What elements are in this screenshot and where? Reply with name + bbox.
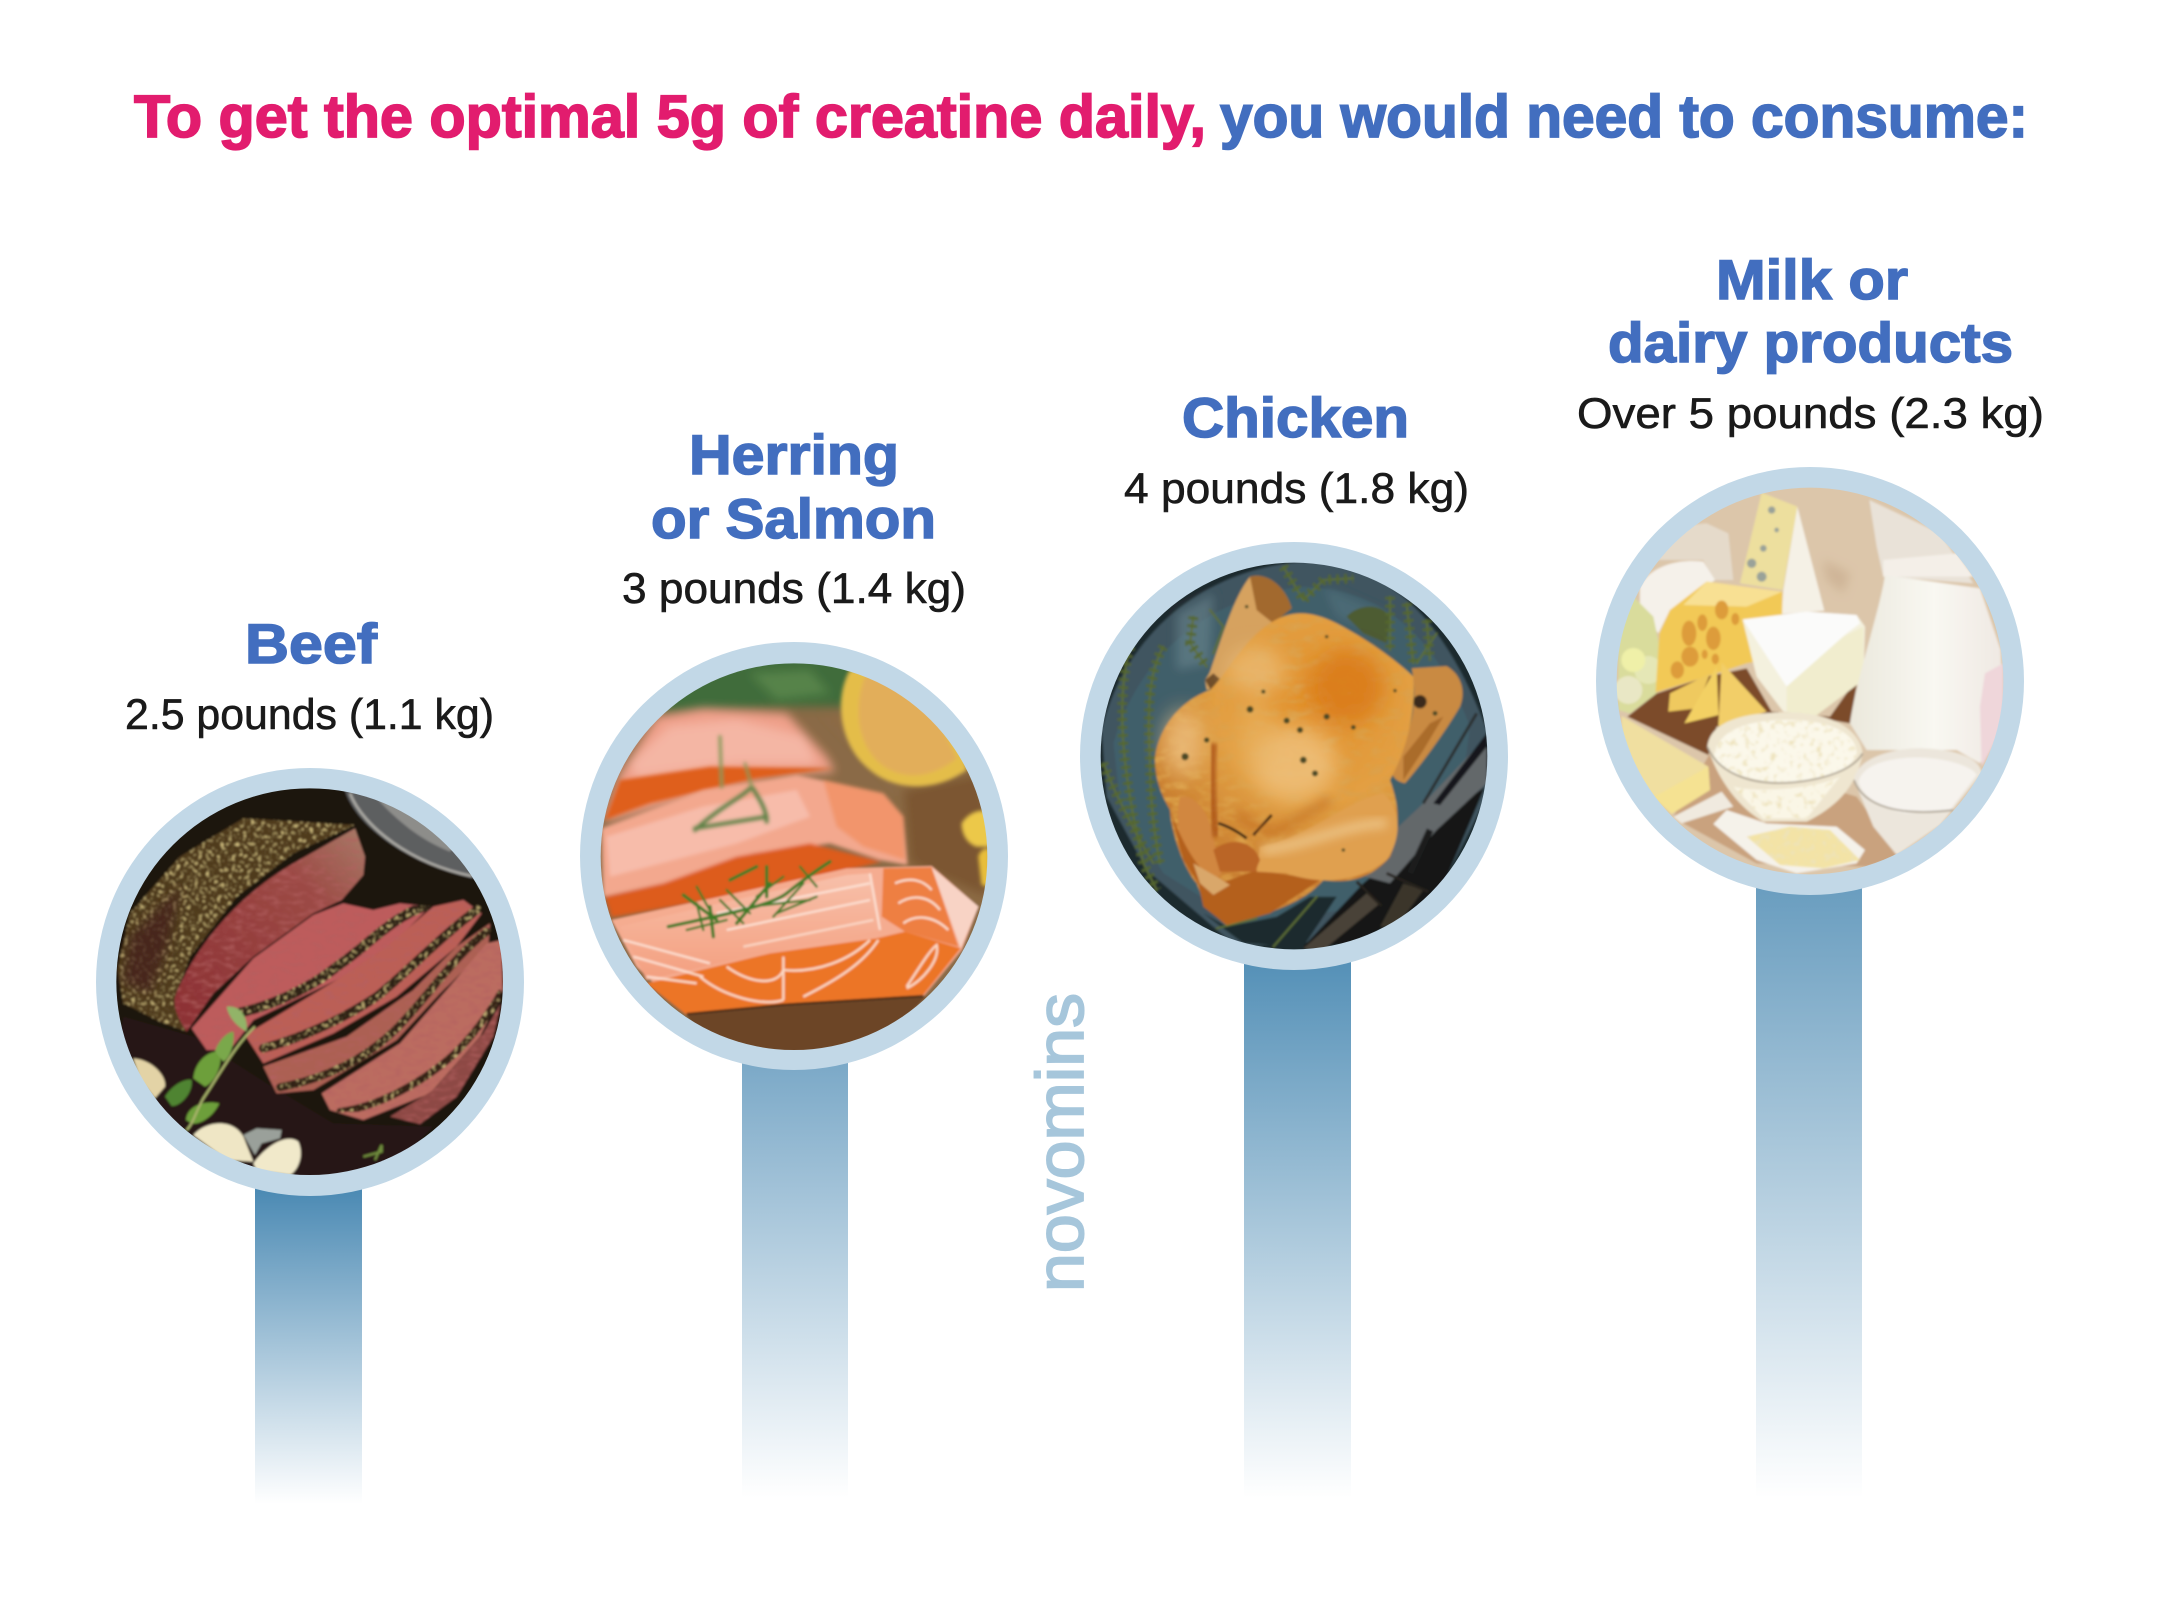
salmon fat lines [623,873,948,1002]
amount: dairy: Over 5 pounds (2.3 kg) [1577,390,2044,438]
brie [1743,612,1865,715]
ring: chicken [1080,542,1508,970]
photo: dairy assortment [1613,483,2007,880]
heading: herring or salmon: or Salmon [651,487,936,550]
dill sprigs [668,862,830,937]
thyme sprigs [1103,567,1437,947]
title: To get the optimal 5g of creatine daily, [134,83,1206,150]
small cheese wedges [1668,673,1710,712]
heading: herring or salmon: Herring [689,423,899,486]
title [134,83,2028,150]
panel: beef [96,612,524,1504]
heading: milk or dairy products [1608,248,2013,374]
photo: roast beef [113,780,513,1180]
watermark: novomins logo: novomins [1023,993,1098,1292]
wood board [687,996,927,1053]
gradient bar: dairy [1756,885,1862,1498]
swiss cheese [1656,582,1782,692]
heading: milk or dairy products: dairy products [1608,311,2013,374]
title: you would need to consume: [1220,83,2028,150]
herb crust edges [237,906,501,1112]
photo: salmon fillets [597,650,993,1053]
panel: herring or salmon [580,423,1008,1498]
infographic canvas [96,92,2042,1490]
drumsticks [1178,796,1222,876]
back fillet [603,708,835,822]
panel: chicken [1080,386,1508,1498]
chicken body [1155,613,1414,925]
herb leaves [165,1007,247,1124]
carving fork and knife [1365,737,1487,883]
meat slices [175,828,503,1124]
ring: salmon [580,642,1008,1070]
spoon with grated cheese [1713,810,1865,873]
garlic cloves [133,1058,165,1098]
heading: beef: Beef [245,612,377,675]
blue cheese [1782,507,1824,614]
herb flecks [1181,605,1437,852]
glass jug [1657,523,1733,580]
butter block [1621,716,1708,796]
milk pitcher [1869,500,1973,583]
wooden board [1627,668,1858,755]
roast crust [117,818,355,1032]
gradient bar: salmon [742,1060,848,1498]
photo: roast chicken [1098,560,1490,952]
heading: chicken: Chicken [1182,386,1409,449]
chicken wings [1204,576,1272,691]
pink glass [1980,663,2003,767]
ring: beef [96,768,524,1196]
lemon [841,670,990,887]
plate [1102,562,1487,947]
grapes jar [1618,597,1662,713]
ring: dairy [1596,467,2024,895]
cottage cheese bowl [1707,712,1863,822]
sour cream bowl [1854,748,1982,855]
front fillet [612,864,977,997]
amount: beef: 2.5 pounds (1.1 kg) [125,691,494,739]
amount: chicken: 4 pounds (1.8 kg) [1124,465,1469,513]
amount: salmon: 3 pounds (1.4 kg) [622,565,966,613]
heading: milk or dairy products: Milk or [1716,248,1908,311]
heading: herring or salmon [651,423,936,550]
gradient bar: chicken [1244,960,1351,1498]
middle fillet [602,775,907,917]
gradient bar: beef [255,1188,362,1504]
panel: milk or dairy products [1577,248,2044,1498]
